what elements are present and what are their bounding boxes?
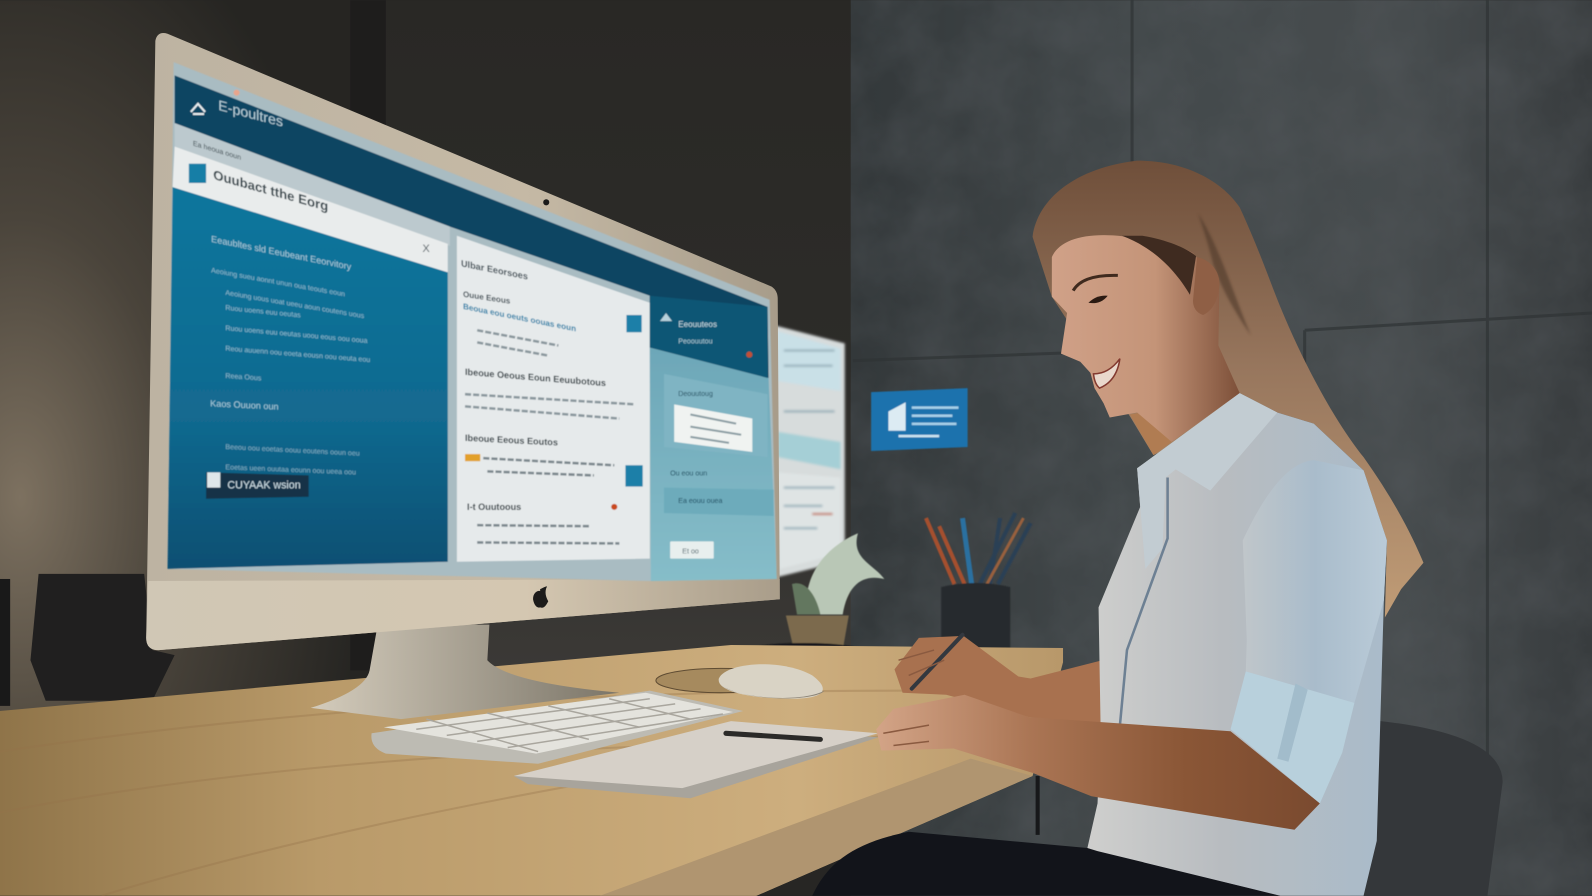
hair shadow	[1198, 213, 1251, 335]
woman	[812, 161, 1423, 896]
middle articles column: Ibeoue Oeous Eoun Eeuubotous	[465, 367, 606, 388]
middle articles column: I-t Ouutoous	[467, 502, 521, 512]
middle articles column: Beoua eou oeuts oouas eoun	[463, 302, 576, 333]
notebook	[514, 721, 878, 798]
right teal panel: Ou eou oun	[670, 469, 707, 477]
right teal panel: Ea eouu ouea	[678, 497, 722, 505]
face and neck	[1052, 235, 1240, 442]
monitor stand	[311, 625, 619, 719]
smile	[1093, 359, 1120, 388]
top header bar: E-poultres	[218, 98, 283, 131]
keyboard	[371, 691, 743, 764]
second monitor	[774, 325, 845, 577]
blue content panel: Reea Oous	[225, 372, 262, 382]
blue content panel: Eeaubltes sld Eeubeant Eeorvitory	[211, 234, 352, 272]
right teal panel	[650, 296, 777, 581]
cuff band	[1277, 684, 1308, 762]
pen in hand	[912, 635, 963, 689]
monitor	[146, 33, 780, 719]
blue content panel: Kaos Ouuon oun	[210, 398, 279, 412]
middle articles column	[457, 236, 650, 562]
blue content panel	[168, 187, 448, 569]
desk	[0, 645, 1063, 896]
white title band: Ouubact tthe Eorg	[213, 167, 328, 214]
white title band: X	[422, 243, 430, 255]
collar	[1137, 393, 1277, 569]
hair	[1033, 161, 1423, 618]
monitor bezel	[146, 33, 780, 650]
near arm and hand	[876, 695, 1320, 830]
blue content panel: Aeoiung uous uoat ueeu aoun coutens uous	[225, 289, 365, 320]
middle articles column: Ulbar Eeorsoes	[461, 258, 528, 282]
right teal panel: Peoouutou	[678, 337, 713, 345]
background office chair	[0, 574, 175, 706]
mouse pad	[656, 668, 786, 693]
right teal panel: Eeouuteos	[678, 320, 717, 329]
call to action button	[206, 472, 309, 499]
trousers	[812, 832, 1280, 896]
middle articles column: Ibeoue Eeous Eoutos	[465, 433, 558, 448]
white title band	[173, 146, 448, 272]
blue content panel: Ruou uoens euu oeutas	[225, 304, 301, 319]
office chair	[1350, 719, 1503, 896]
ear	[1193, 257, 1219, 315]
middle articles column: Ouue Eeous	[463, 290, 511, 306]
blue content panel: Reou auuenn oou eoeta eousn oou oeuta eou	[225, 345, 370, 364]
hair under chin	[1130, 411, 1172, 455]
plant	[742, 533, 884, 661]
pencil cup	[926, 513, 1031, 660]
blue content panel: Aeoiung sueu aonnt unun oua teouts eoun	[211, 266, 345, 298]
far arm and hand	[894, 636, 1107, 726]
right teal panel: Deouutoug	[678, 390, 713, 398]
monitor chin	[146, 579, 780, 650]
sub header strip	[175, 123, 450, 246]
top header bar	[175, 75, 769, 378]
apple logo	[533, 586, 548, 608]
rolled cuff	[1231, 671, 1354, 803]
wall sign	[871, 388, 968, 451]
call to action button: CUYAAK wsion	[227, 480, 301, 492]
eyebrow	[1073, 275, 1118, 291]
blue content panel: Beeou oou eoetas oouu eoutens ooun oeu	[225, 443, 360, 458]
finger detail	[883, 650, 944, 745]
blue content panel: Ruou uoens euu oeutas uoou eous oou ooua	[225, 324, 367, 345]
blue content panel: Eoetas ueen ouutaa eounn oou ueea oou	[225, 463, 356, 477]
eye	[1088, 296, 1108, 303]
screen	[168, 62, 777, 581]
right teal panel: Et oo	[682, 548, 699, 556]
mouse	[719, 664, 824, 699]
shirt	[1087, 393, 1387, 896]
sub header strip: Ea heoua ooun	[193, 139, 241, 162]
pen on notebook	[726, 733, 820, 739]
webcam	[543, 199, 549, 205]
hair front shadow	[1122, 236, 1196, 295]
placket	[1119, 477, 1168, 736]
sleeve	[1243, 460, 1387, 703]
